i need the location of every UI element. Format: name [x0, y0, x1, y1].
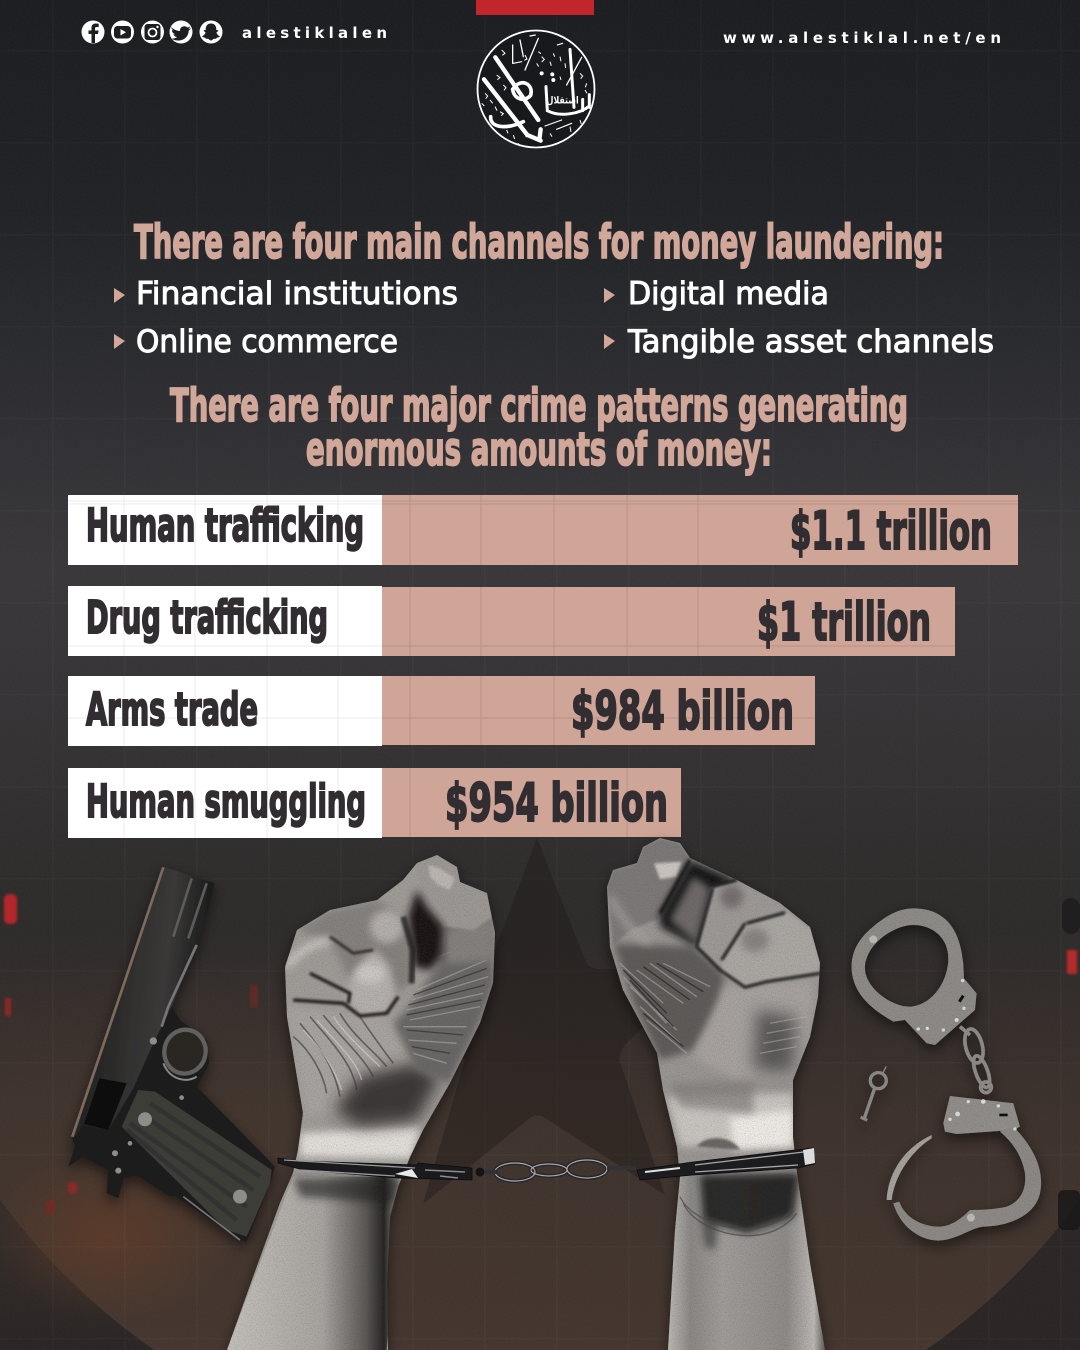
bullet: digital media: Digital media — [628, 276, 829, 312]
left creases — [293, 973, 398, 1016]
social media icons — [82, 20, 222, 44]
illustration: pistol — [68, 867, 275, 1242]
bar: arms trade — [68, 676, 815, 746]
left middle finger — [297, 900, 412, 993]
upper cuff — [852, 908, 977, 1045]
left wrist highlight — [300, 1127, 420, 1158]
right palm — [613, 943, 723, 1060]
faint star behind the hands — [380, 838, 700, 1204]
bar: arms trade: Arms trade — [86, 683, 258, 736]
red and dark background flecks — [4, 894, 1080, 1230]
right creases — [697, 880, 820, 987]
right index finger — [696, 882, 738, 968]
illustration: open handcuffs and key — [852, 908, 1041, 1241]
social handle: alestiklalen — [242, 24, 387, 42]
logo: circular calligraphy seal — [478, 30, 594, 148]
bar: drug trafficking: $1 trillion — [757, 592, 931, 653]
right forearm — [667, 1173, 827, 1350]
pistol frame — [68, 1007, 275, 1242]
cuff chain — [960, 1027, 993, 1093]
bar: human smuggling — [68, 768, 681, 838]
logo: circular calligraphy seal: استقلال — [547, 95, 579, 106]
bar: drug trafficking — [68, 586, 955, 656]
pistol grip — [122, 1090, 272, 1237]
bar: human trafficking — [68, 495, 1018, 565]
handcuff key — [861, 1066, 886, 1120]
bar: drug trafficking: Drug trafficking — [86, 591, 328, 644]
left top finger — [424, 890, 492, 930]
illustration: handcuffs on wrists — [278, 1148, 815, 1181]
left cuff band — [278, 1158, 484, 1180]
illustration: left fist — [220, 850, 505, 1350]
right cuff band — [637, 1148, 815, 1180]
left dark gap between fingers — [408, 890, 443, 970]
bullet: online commerce: Online commerce — [136, 324, 398, 360]
heading: four major crime patterns: enormous amounts of money: — [306, 423, 772, 476]
pistol trigger guard — [160, 1026, 210, 1077]
bar: human smuggling: $954 billion — [445, 773, 668, 834]
top red tab — [476, 0, 594, 15]
left palm — [293, 1013, 402, 1109]
bar: arms trade: $984 billion — [571, 681, 794, 742]
channel list — [114, 276, 994, 360]
bar chart: crime proceeds — [68, 495, 1018, 838]
lower cuff — [887, 1096, 1041, 1241]
bullet: tangible asset channels: Tangible asset channels — [627, 324, 994, 360]
chain links — [485, 1160, 636, 1181]
website url: www.alestiklal.net/en — [723, 29, 1001, 47]
right wrist highlight — [667, 1093, 793, 1147]
pistol slide — [72, 867, 215, 1138]
bar: human smuggling: Human smuggling — [86, 775, 366, 828]
right knuckle finger — [722, 912, 820, 988]
illustration: right fist — [600, 835, 830, 1350]
bar: human trafficking: Human trafficking — [86, 499, 364, 552]
right dark gap — [660, 860, 737, 947]
bullet: financial institutions: Financial institutions — [136, 276, 458, 312]
left forearm — [227, 1177, 402, 1350]
left knuckle — [347, 950, 395, 1015]
heading: four major crime patterns — [170, 379, 908, 476]
left heel of hand — [393, 893, 495, 1083]
right thumb — [607, 838, 690, 947]
